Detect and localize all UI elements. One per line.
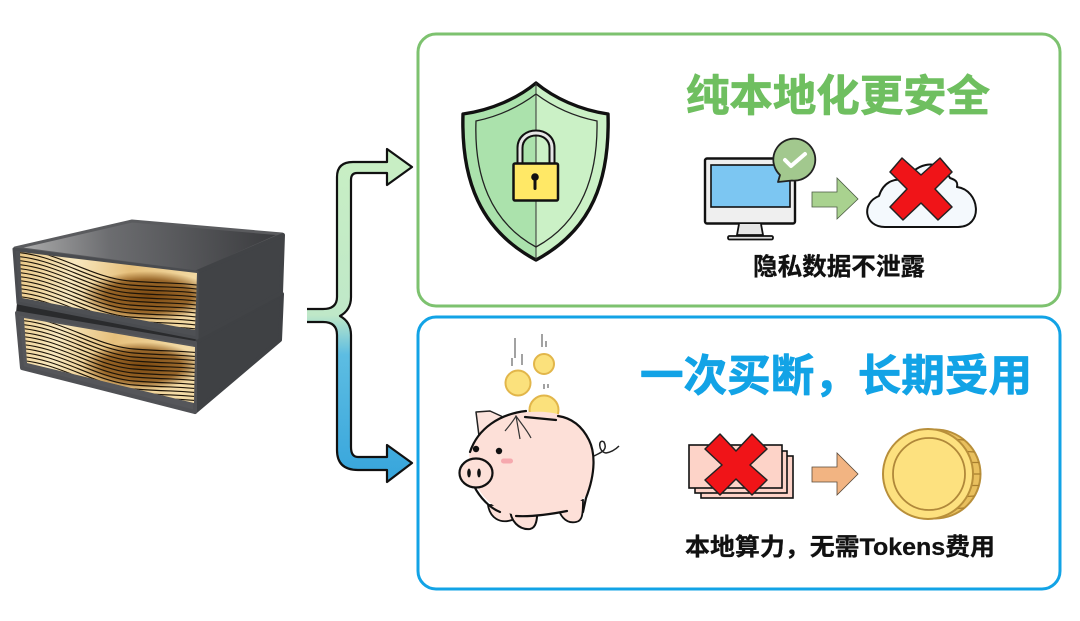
panel: local security [418, 34, 1060, 306]
check bubble [773, 139, 815, 182]
caption: data privacy: 隐私数据不泄露 [753, 253, 926, 281]
body outline [470, 411, 594, 516]
tail [594, 441, 619, 456]
top server [12, 220, 285, 340]
padlock [514, 133, 558, 200]
bottom server [14, 294, 282, 426]
left foot [488, 505, 530, 521]
caption: no token fees: 本地算力，无需Tokens费用 [685, 534, 995, 561]
ear [476, 411, 507, 436]
arrow: brace splitting to both panels [307, 149, 412, 482]
icon: shield with padlock [463, 83, 608, 260]
heading: local is safer: 纯本地化更安全 [686, 73, 990, 121]
snout [460, 458, 492, 488]
body [469, 412, 594, 516]
icon: banknotes crossed out [689, 434, 793, 498]
heading: one-time purchase: 一次买断，长期受用 [640, 353, 1032, 401]
icon: piggy bank with coins [460, 334, 619, 529]
falling coins [506, 334, 558, 424]
icon: monitor with check bubble [705, 139, 815, 240]
right foot [557, 500, 583, 522]
icon: gold coin [883, 429, 980, 519]
eyes [473, 446, 479, 452]
icon: stacked server devices [10, 221, 283, 426]
arrow: notes to coin [812, 453, 858, 495]
panel: one-time purchase [418, 317, 1060, 589]
middle foot [510, 505, 537, 529]
icon: cloud crossed out [867, 158, 976, 227]
blush [501, 458, 513, 464]
arrow: monitor to cloud [812, 178, 858, 219]
